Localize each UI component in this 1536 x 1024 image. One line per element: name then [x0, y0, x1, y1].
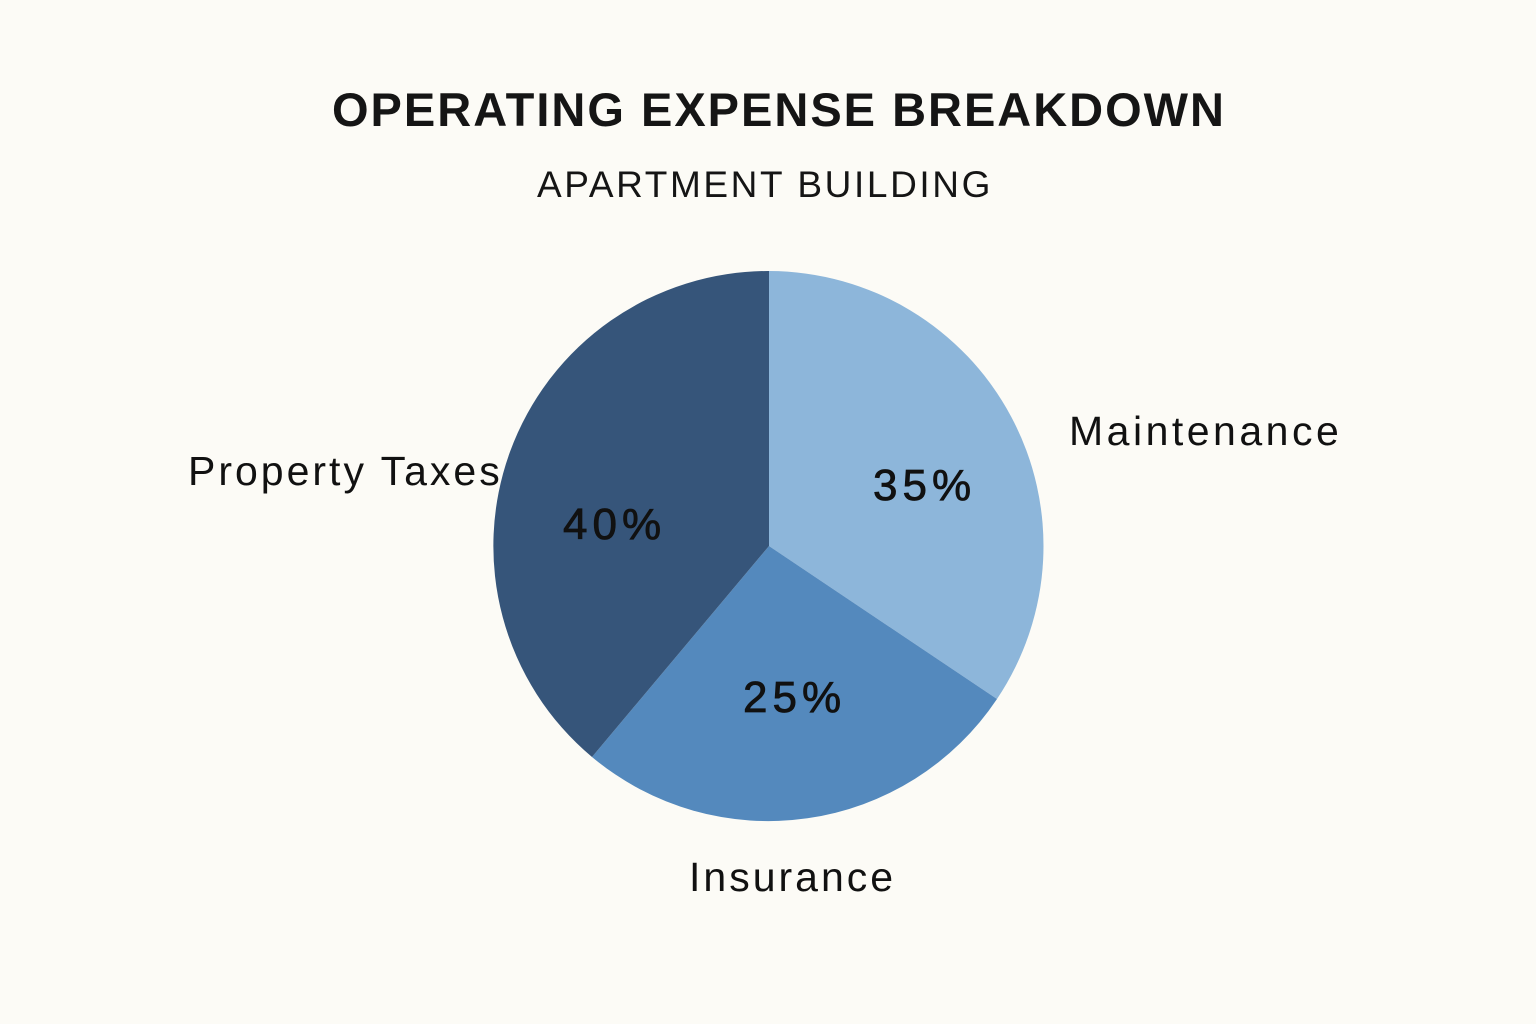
value: 35%: 35% [873, 461, 976, 510]
value: 25%: 25% [743, 673, 846, 722]
slice: property taxes [493, 271, 769, 757]
slice: insurance [592, 546, 997, 821]
label: property taxes: Property Taxes [188, 448, 503, 494]
label: insurance: Insurance [689, 854, 896, 900]
title: OPERATING EXPENSE BREAKDOWN [332, 83, 1226, 136]
label: maintenance: Maintenance [1069, 408, 1342, 454]
slice: maintenance [769, 271, 1043, 699]
value: 40%: 40% [563, 500, 666, 549]
subtitle: APARTMENT BUILDING [537, 164, 993, 205]
